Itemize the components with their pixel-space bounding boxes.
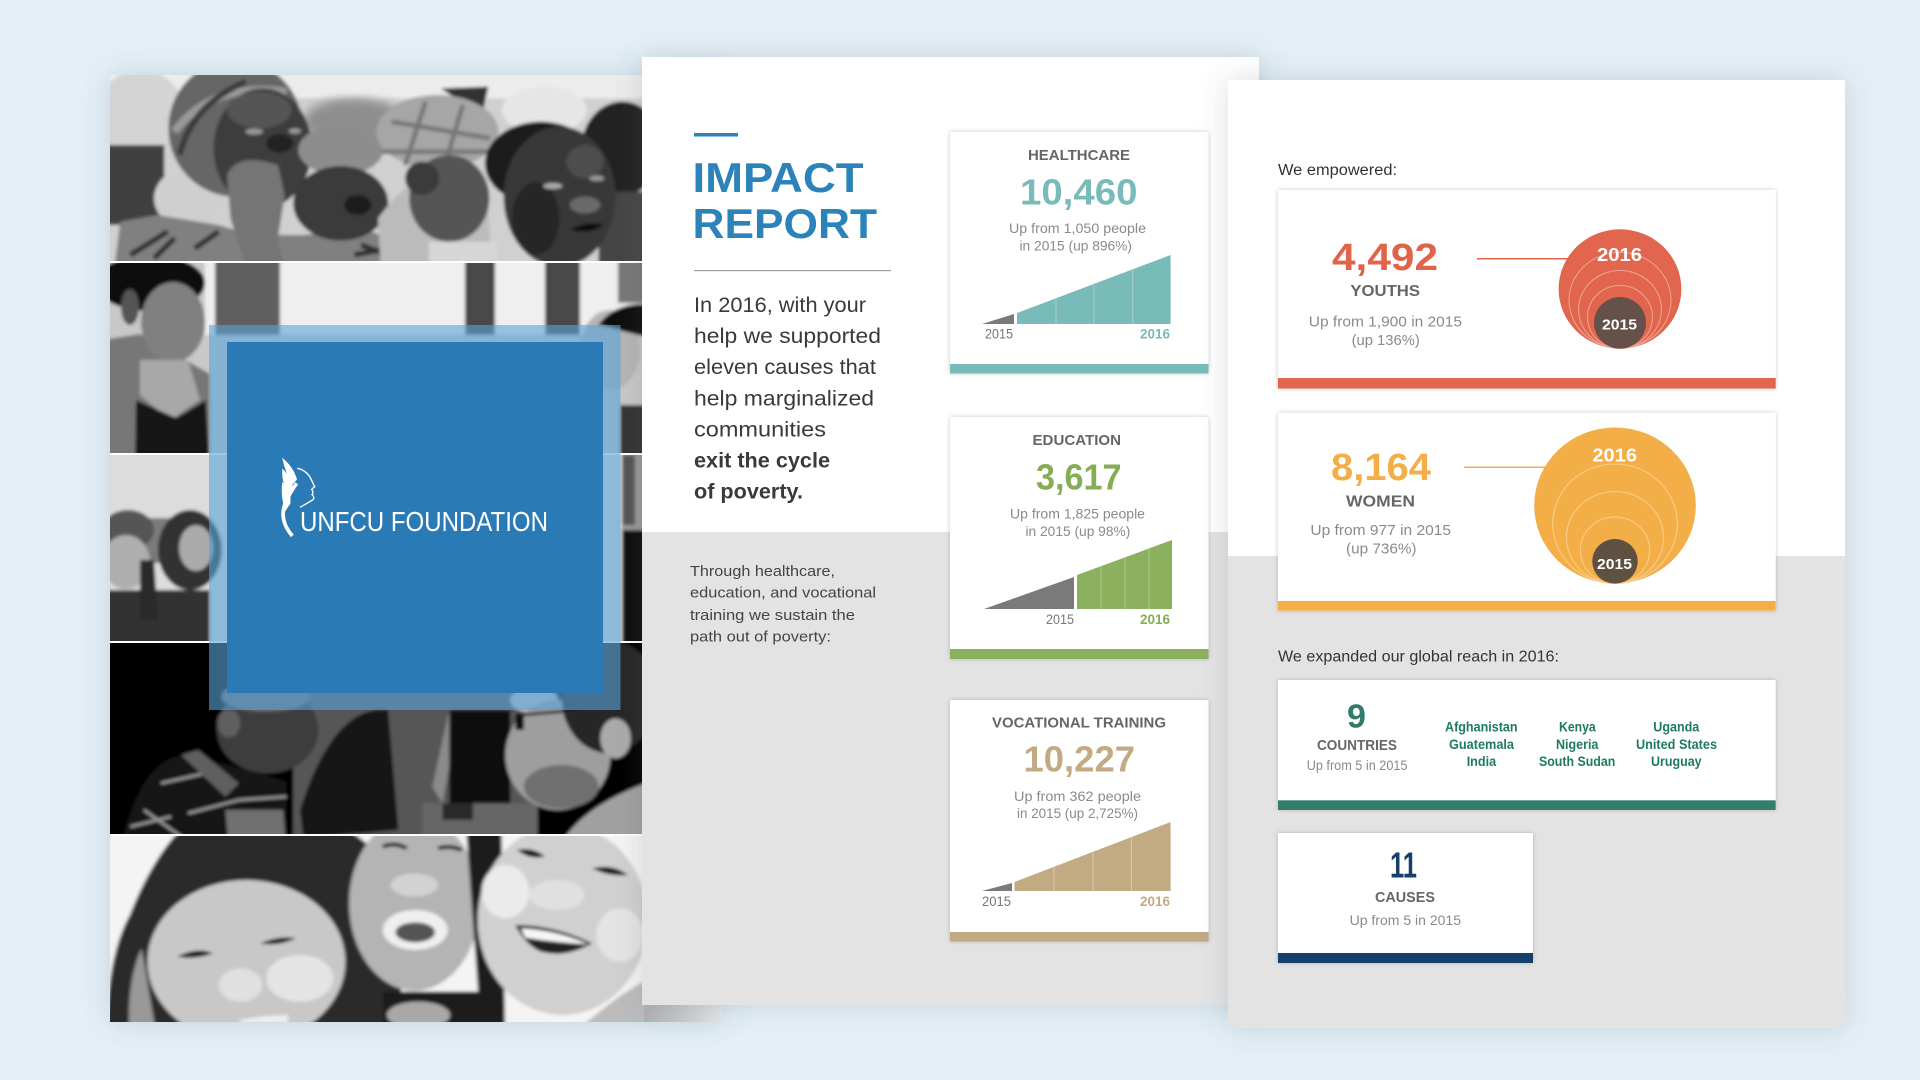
card: healthcare: Up from 1,050 people: [1009, 221, 1146, 236]
country list: [1445, 720, 1717, 769]
country list: India: [1467, 754, 1497, 769]
card: youths: YOUTHS: [1350, 283, 1420, 300]
card: countries: [1278, 680, 1776, 810]
card: women: WOMEN: [1346, 494, 1415, 510]
photo: child and man: [110, 643, 642, 834]
overlay: translucent blue frame: [209, 325, 620, 710]
supporting text: path out of poverty:: [690, 628, 831, 646]
card: youths: Up from 1,900 in 2015: [1309, 313, 1462, 330]
card: youths: 4,492: [1332, 237, 1438, 279]
photo: woman with earrings: [110, 263, 642, 453]
chart: healthcare area: 2015: [985, 326, 1013, 342]
intro text: of poverty.: [694, 480, 803, 504]
chart: youths circles: 2016: [1597, 245, 1642, 265]
icon: wheat and face logo: [282, 459, 315, 536]
card: vocational training: VOCATIONAL TRAINING: [992, 715, 1166, 732]
chart: healthcare area: [982, 255, 1171, 342]
card: youths: [1278, 190, 1776, 389]
chart: education area: 2015: [1046, 612, 1074, 627]
card: women: Up from 977 in 2015: [1310, 522, 1451, 539]
card: education: EDUCATION: [1032, 432, 1121, 449]
card: women: (up 736%): [1346, 541, 1416, 558]
logo wordmark: UNFCU FOUNDATION: [300, 506, 548, 537]
supporting text: Through healthcare,: [690, 563, 835, 580]
card: healthcare: in 2015 (up 896%): [1020, 239, 1132, 254]
card: causes: CAUSES: [1375, 890, 1435, 906]
heading accent dash: [694, 133, 738, 136]
supporting text: education, and vocational: [690, 584, 876, 602]
card: education: in 2015 (up 98%): [1026, 524, 1130, 539]
intro text: [694, 294, 881, 504]
country list: United States: [1636, 737, 1717, 752]
logo panel: [227, 342, 603, 693]
chart: education area: 2016: [1140, 612, 1170, 627]
card: countries: 9: [1347, 697, 1366, 734]
supporting text: training we sustain the: [690, 607, 855, 624]
photo: two young women: [110, 455, 642, 641]
card: education: Up from 1,825 people: [1010, 506, 1145, 521]
intro text: In 2016, with your: [694, 294, 866, 317]
country list: Uganda: [1653, 720, 1700, 735]
label: we empowered: We empowered:: [1278, 162, 1397, 179]
supporting text: [690, 563, 876, 646]
country list: Uruguay: [1651, 754, 1702, 769]
card: countries: Up from 5 in 2015: [1307, 758, 1408, 773]
label: global reach: We expanded our global reach in 2016:: [1278, 648, 1559, 665]
country list: Nigeria: [1556, 737, 1599, 752]
photo: women looking up: [110, 75, 642, 261]
title: REPORT: [692, 200, 877, 247]
intro text: help marginalized: [694, 388, 874, 410]
chart: healthcare area: 2016: [1140, 326, 1170, 342]
card: youths: (up 136%): [1352, 332, 1420, 349]
title: IMPACT: [692, 154, 864, 201]
card: countries: COUNTRIES: [1317, 738, 1397, 754]
panel: photo cover: [86, 55, 722, 1048]
title: [692, 154, 877, 247]
title divider: [694, 270, 891, 271]
card: causes: [1278, 833, 1533, 963]
card: women: 8,164: [1331, 447, 1431, 489]
country list: Afghanistan: [1445, 720, 1518, 735]
card: vocational training: [950, 700, 1208, 942]
chart: vocational area: 2015: [982, 894, 1011, 909]
card: vocational training: Up from 362 people: [1014, 789, 1141, 804]
intro text: eleven causes that: [694, 356, 876, 379]
card: education: [950, 417, 1208, 659]
panel: impact report: [642, 57, 1259, 1005]
card: causes: Up from 5 in 2015: [1350, 913, 1461, 928]
intro text: communities: [694, 418, 826, 442]
connector line: [1477, 258, 1569, 260]
chart: youths circles: [1559, 229, 1681, 349]
card: causes: 11: [1390, 845, 1417, 886]
chart: youths circles: 2015: [1602, 317, 1637, 334]
country list: Guatemala: [1449, 737, 1514, 752]
chart: vocational area: 2016: [1140, 894, 1170, 909]
card: vocational training: in 2015 (up 2,725%): [1017, 806, 1138, 821]
chart: women circles: [1534, 428, 1696, 584]
card: women: [1278, 412, 1776, 611]
card: education: 3,617: [1036, 456, 1122, 497]
country list: Kenya: [1559, 720, 1596, 735]
card: healthcare: 10,460: [1020, 171, 1138, 212]
card: healthcare: [950, 132, 1208, 374]
chart: education area: [984, 540, 1172, 627]
chart: women circles: 2016: [1592, 445, 1637, 465]
chart: women circles: 2015: [1597, 556, 1632, 573]
country list: South Sudan: [1539, 754, 1615, 769]
panel: reach: [1228, 80, 1845, 1028]
card: vocational training: 10,227: [1024, 739, 1135, 780]
intro text: exit the cycle: [694, 450, 830, 472]
card: healthcare: HEALTHCARE: [1028, 147, 1130, 164]
intro text: help we supported: [694, 325, 881, 348]
chart: vocational area: [982, 822, 1171, 909]
connector line: [1464, 466, 1545, 468]
photo: three laughing children: [110, 836, 644, 1022]
